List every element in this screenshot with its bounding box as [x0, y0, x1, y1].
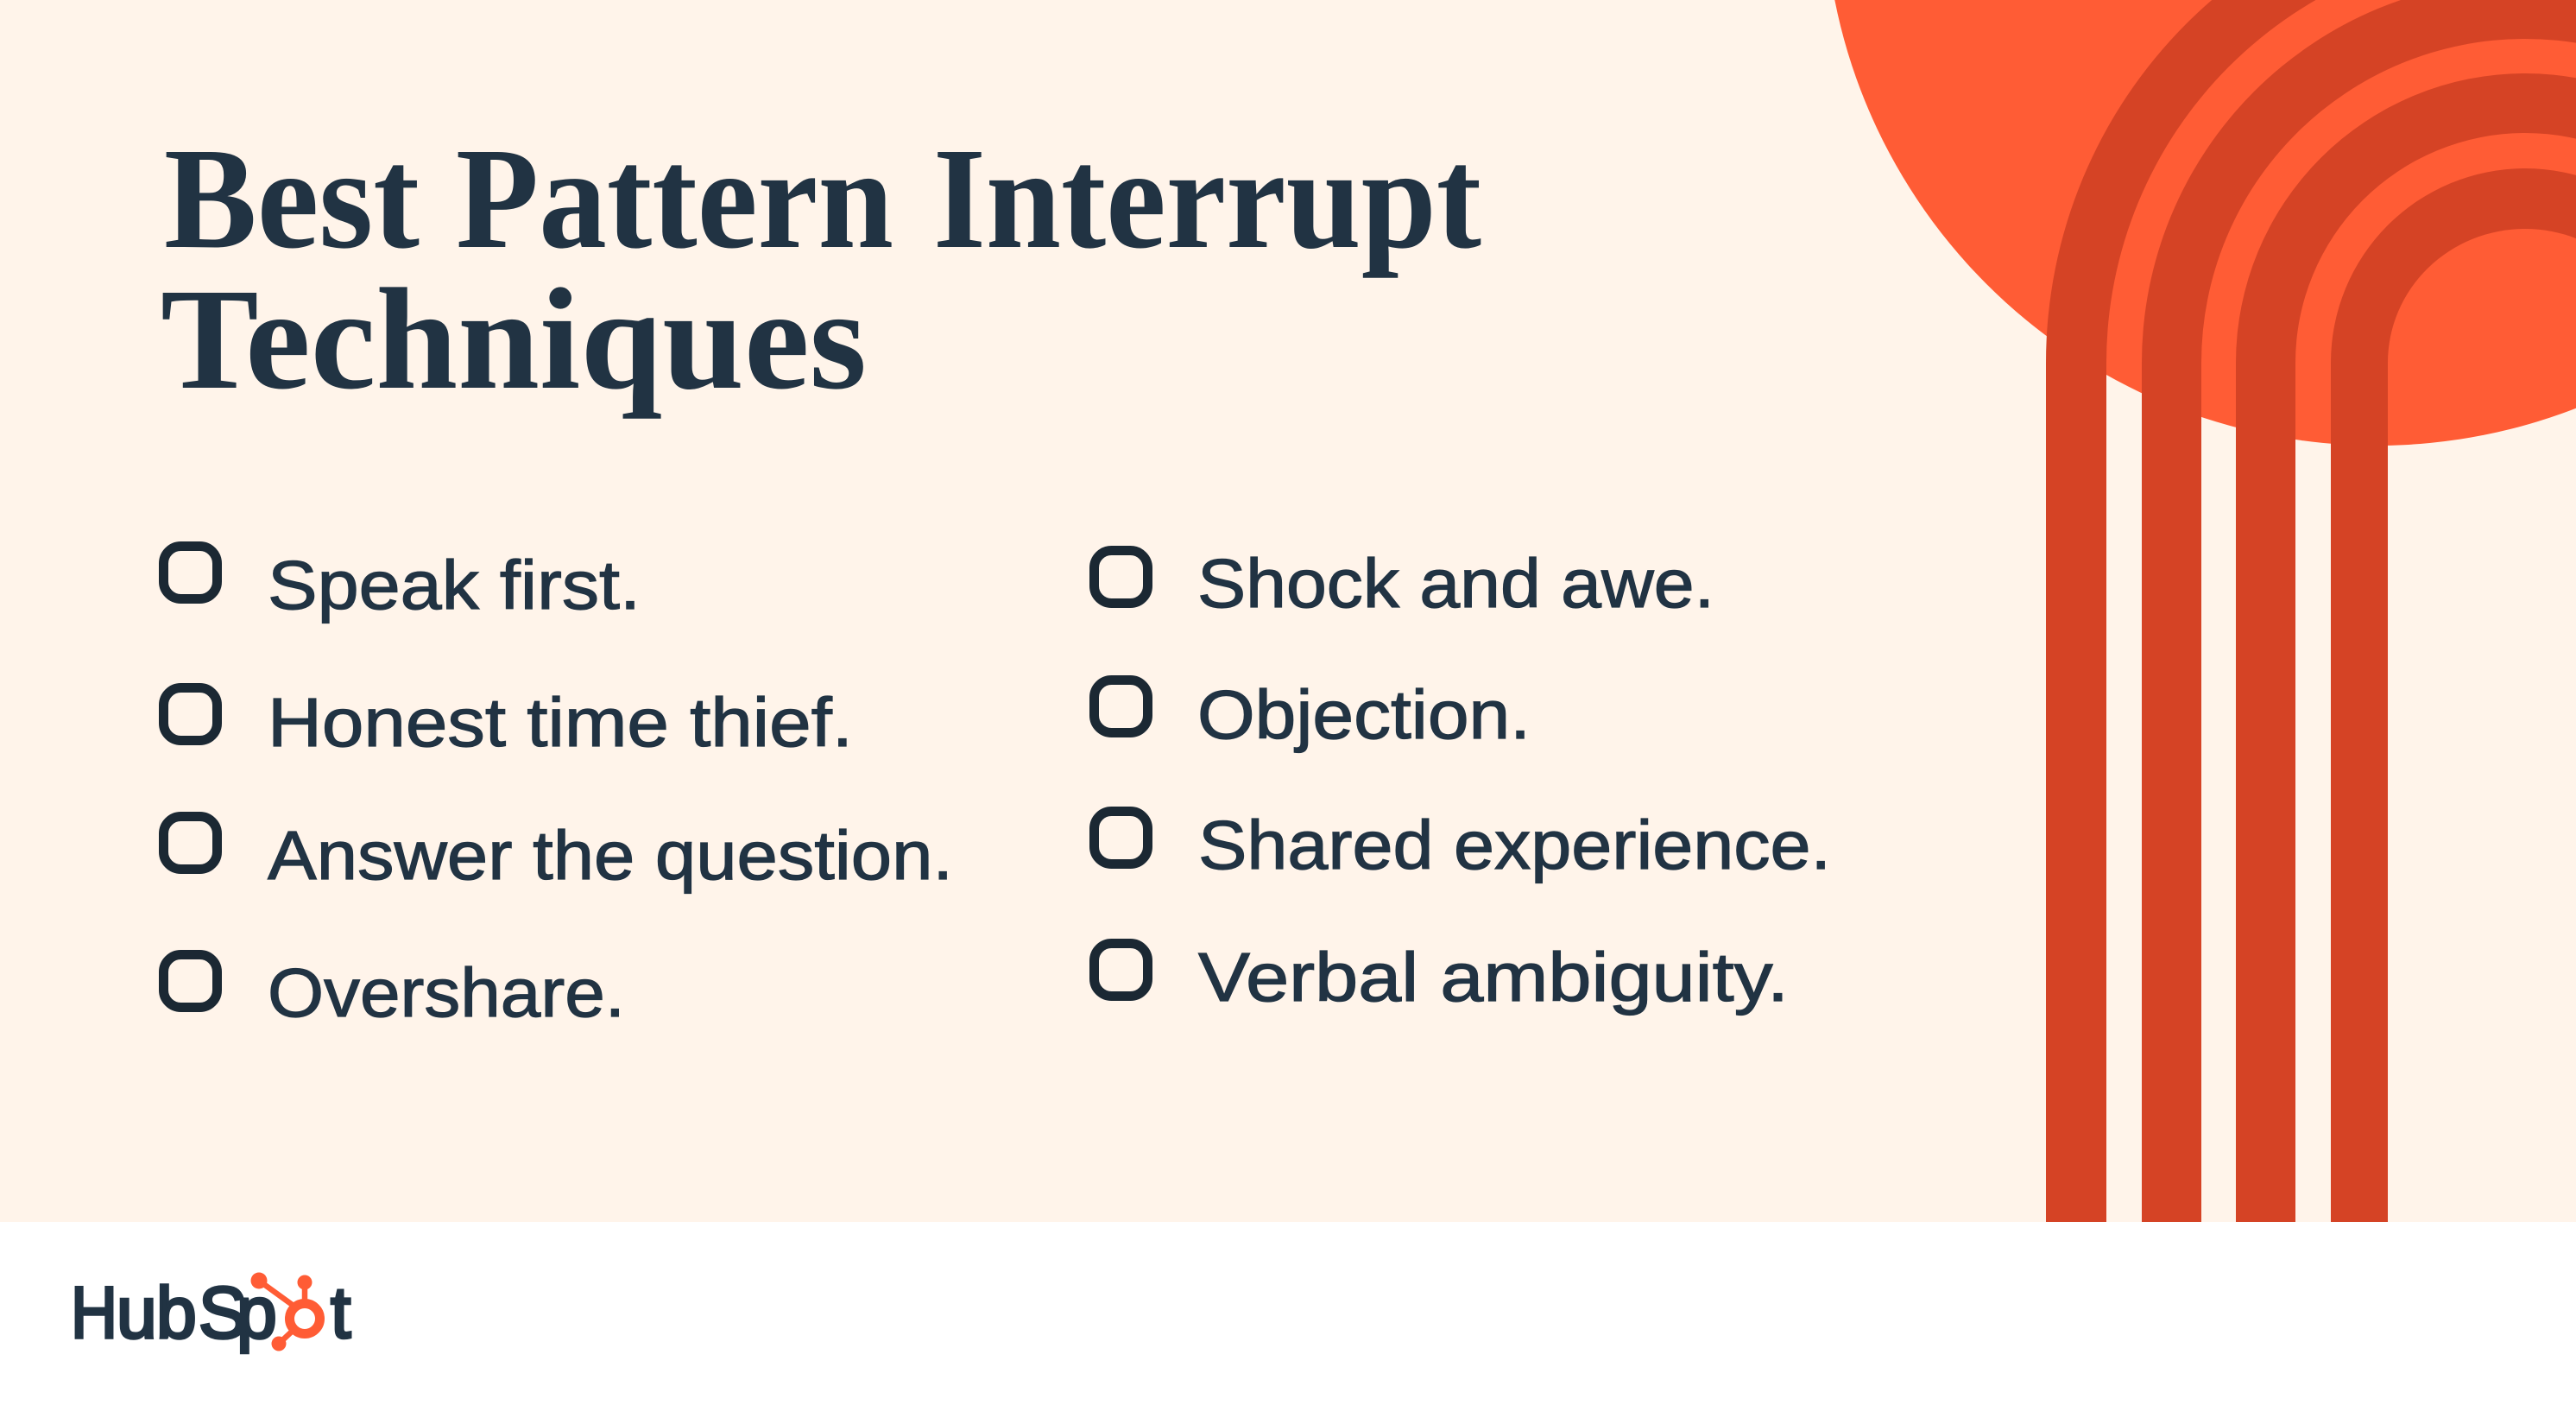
- title: Interrupt: [933, 118, 1481, 279]
- decoration: orange sun with arches: [1824, 0, 2576, 1222]
- title: Techniques: [161, 259, 867, 420]
- item: Objection: Objection.: [1197, 676, 1531, 753]
- item: Honest time thief: Honest time thief.: [268, 684, 853, 761]
- logo: HubSpot: ubSp: [117, 1272, 277, 1353]
- logo: HubSpot: [71, 1272, 350, 1353]
- checklist: left column: [164, 546, 953, 1031]
- checklist: right column: [1095, 545, 1831, 1016]
- arch stripes: [2046, 0, 2576, 1222]
- item: Answer the question: Answer the question.: [268, 817, 953, 894]
- item: Shock and awe: Shock and awe.: [1197, 545, 1714, 622]
- item: Shared experience: Shared experience.: [1198, 807, 1831, 883]
- logo: HubSpot: H: [71, 1272, 117, 1353]
- title: [161, 118, 1481, 420]
- title: Pattern: [456, 118, 893, 279]
- title: Best: [164, 118, 420, 279]
- orange circle: [1824, 0, 2576, 446]
- footer: white band: [0, 1222, 2576, 1405]
- icon: sprocket: [250, 1273, 319, 1351]
- item: Overshare: Overshare.: [268, 954, 625, 1031]
- item: Verbal ambiguity: Verbal ambiguity.: [1198, 939, 1789, 1016]
- logo: HubSpot: t: [331, 1272, 350, 1353]
- item: Speak first: Speak first.: [268, 547, 641, 623]
